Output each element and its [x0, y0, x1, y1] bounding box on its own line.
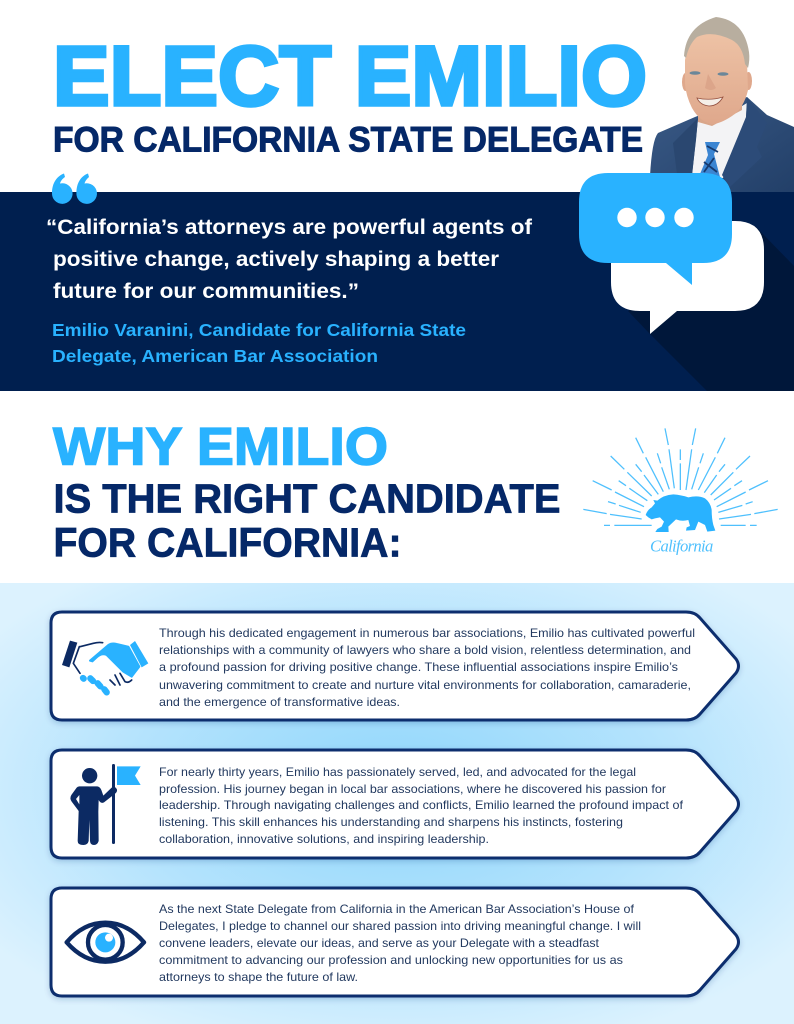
panel: pledge as delegate [51, 888, 738, 996]
icon: chat bubbles [579, 173, 764, 334]
quote attribution [52, 320, 466, 366]
headline: elect emilio: ELECT EMILIO [53, 29, 647, 123]
california bear emblem [583, 428, 778, 556]
lower section background [0, 583, 794, 1024]
quote text: future for our communities.” [53, 280, 359, 303]
quote text [46, 216, 533, 303]
california bear emblem: California [650, 537, 713, 556]
subheadline: FOR CALIFORNIA STATE DELEGATE [53, 120, 643, 160]
panel: thirty years of service [51, 750, 738, 858]
icon: person with flag [70, 764, 141, 845]
icon: eye [67, 923, 144, 962]
description text: convene leaders, elevate our ideas, and serve as your Delegate with a steadfast [159, 936, 600, 950]
long shadow of chat bubbles [628, 226, 794, 391]
description text: leadership. Through navigating challenges and conflicts, Emilio learned the profound impact of [159, 798, 684, 812]
description text: collaboration, innovative solutions, and inspiring leadership. [159, 832, 489, 846]
description text: and the emergence of transformative ideas. [159, 695, 400, 709]
candidate portrait [650, 17, 794, 195]
quote attribution: Delegate, American Bar Association [52, 346, 378, 366]
heading: right candidate: FOR CALIFORNIA: [54, 519, 402, 565]
description text: attorneys to shape the future of law. [159, 970, 358, 984]
quote text: positive change, actively shaping a better [53, 248, 499, 271]
description text: listening. This skill enhances his understanding and sharpens his instincts, fostering [159, 815, 623, 829]
icon: handshake [62, 641, 148, 692]
description text: a profound passion for driving positive change. These influential associations inspire Emilio’s [159, 660, 678, 674]
heading: right candidate [54, 475, 560, 565]
description text: For nearly thirty years, Emilio has passionately served, led, and advocated for the legal [159, 765, 636, 779]
heading: right candidate: IS THE RIGHT CANDIDATE [54, 475, 560, 521]
description text: As the next State Delegate from California in the American Bar Association’s House of [159, 902, 635, 916]
description text: Delegates, I pledge to channel our shared passion into driving meaningful change. I will [159, 919, 641, 933]
icon: quotation marks [52, 174, 97, 204]
description text: unwavering commitment to create and nurture vital environments for collaboration, camaraderie, [159, 678, 691, 692]
description text [159, 902, 641, 984]
description text: relationships with a community of lawyers who share a bold vision, relentless determination, and [159, 643, 691, 657]
description text: commitment to advancing our profession and unlocking new opportunities for us as [159, 953, 623, 967]
description text: Through his dedicated engagement in numerous bar associations, Emilio has cultivated powerful [159, 626, 695, 640]
quote band background [0, 192, 794, 391]
heading: why emilio: WHY EMILIO [53, 418, 388, 476]
panel: bar associations [51, 612, 738, 720]
description text [159, 765, 684, 846]
description text: profession. His journey began in local bar associations, where he discovered his passion for [159, 782, 666, 796]
quote attribution: Emilio Varanini, Candidate for California State [52, 320, 466, 340]
quote text: “California’s attorneys are powerful agents of [46, 216, 533, 239]
description text [159, 626, 695, 709]
